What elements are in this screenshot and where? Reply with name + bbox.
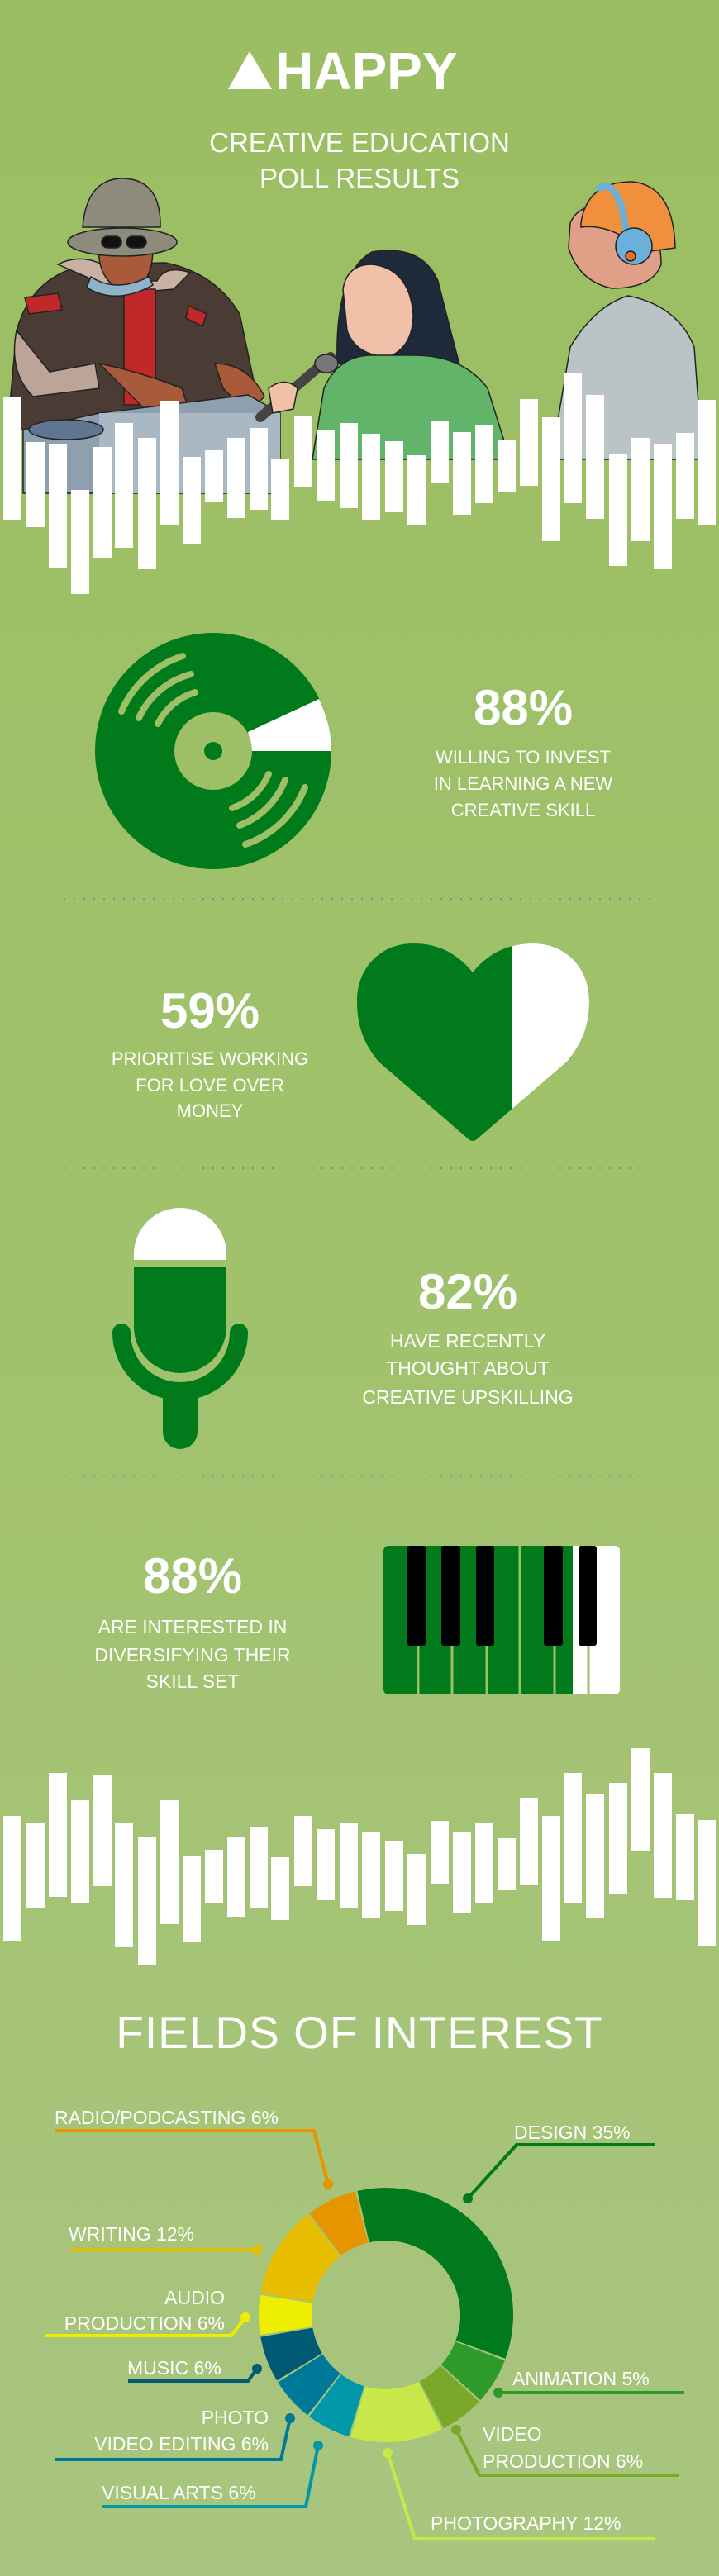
icon: piano keys: [383, 1546, 620, 1694]
label: audio production: PRODUCTION 6%: [64, 2312, 225, 2334]
stat: 82% upskilling: [362, 1264, 574, 1408]
illustration: three musicians: [9, 178, 702, 493]
label: radio/podcasting: [55, 2107, 333, 2189]
figure: mixer: [23, 395, 280, 493]
stat: 88% diversifying: [94, 1548, 291, 1692]
label: video production: PRODUCTION 6%: [483, 2450, 643, 2472]
stat: 82% upskilling: HAVE RECENTLY: [390, 1330, 545, 1352]
stat: 88% diversifying: 88%: [143, 1548, 242, 1604]
subtitle: POLL RESULTS: [260, 163, 459, 193]
stat: 82% upskilling: THOUGHT ABOUT: [386, 1357, 550, 1379]
heading: fields of interest: FIELDS OF INTEREST: [116, 2007, 603, 2058]
stat: 88% diversifying: SKILL SET: [146, 1671, 239, 1692]
label: visual arts: [102, 2441, 323, 2507]
stat: 88% invest: IN LEARNING A NEW: [434, 773, 612, 794]
icon: microphone: [121, 1208, 239, 1449]
sound wave: top: [3, 373, 716, 594]
donut chart: fields of interest: [244, 2173, 528, 2457]
stat: 59% love over money: PRIORITISE WORKING: [112, 1048, 308, 1069]
icon: vinyl record: [95, 633, 331, 869]
stat: 88% invest: 88%: [474, 680, 573, 735]
label: music: [127, 2357, 262, 2381]
icon: heart: [357, 943, 589, 1141]
label: music: MUSIC 6%: [127, 2357, 221, 2379]
figure: DJ: [9, 178, 264, 430]
label: writing: WRITING 12%: [69, 2223, 194, 2245]
label: photography: PHOTOGRAPHY 12%: [431, 2512, 621, 2534]
label: photo video editing: PHOTO: [202, 2407, 269, 2428]
subtitle: [209, 127, 510, 193]
stat: 59% love over money: MONEY: [177, 1100, 244, 1121]
label: photo video editing: [55, 2407, 295, 2460]
sound wave: bottom: [3, 1748, 716, 1965]
stat: 88% invest: [434, 680, 612, 820]
label: design: DESIGN 35%: [514, 2122, 631, 2143]
label: visual arts: VISUAL ARTS 6%: [102, 2482, 256, 2503]
label: video production: [451, 2423, 679, 2475]
stat: 82% upskilling: CREATIVE UPSKILLING: [362, 1386, 574, 1408]
subtitle: CREATIVE EDUCATION: [209, 127, 510, 158]
label: audio production: [45, 2287, 250, 2336]
stat: 59% love over money: [112, 983, 308, 1121]
label: animation: [493, 2368, 684, 2398]
figure: singer: [260, 250, 510, 459]
stat: 59% love over money: FOR LOVE OVER: [136, 1075, 284, 1096]
label: design: [463, 2122, 655, 2203]
label: audio production: AUDIO: [164, 2287, 225, 2308]
stat: 59% love over money: 59%: [160, 983, 260, 1038]
label: radio/podcasting: RADIO/PODCASTING 6%: [55, 2107, 279, 2128]
figure: man with headphones: [551, 182, 702, 459]
label: photo video editing: VIDEO EDITING 6%: [94, 2433, 269, 2455]
stat: 88% diversifying: DIVERSIFYING THEIR: [94, 1644, 291, 1666]
label: photography: [383, 2448, 655, 2539]
logo: HAPPY: HAPPY: [275, 41, 458, 101]
stat: 88% diversifying: ARE INTERESTED IN: [98, 1616, 287, 1637]
stat: 88% invest: CREATIVE SKILL: [451, 800, 595, 820]
label: writing: [69, 2223, 262, 2255]
stat: 88% invest: WILLING TO INVEST: [436, 747, 611, 768]
stat: 82% upskilling: 82%: [418, 1264, 517, 1319]
label: video production: VIDEO: [483, 2423, 542, 2445]
label: animation: ANIMATION 5%: [512, 2368, 650, 2389]
